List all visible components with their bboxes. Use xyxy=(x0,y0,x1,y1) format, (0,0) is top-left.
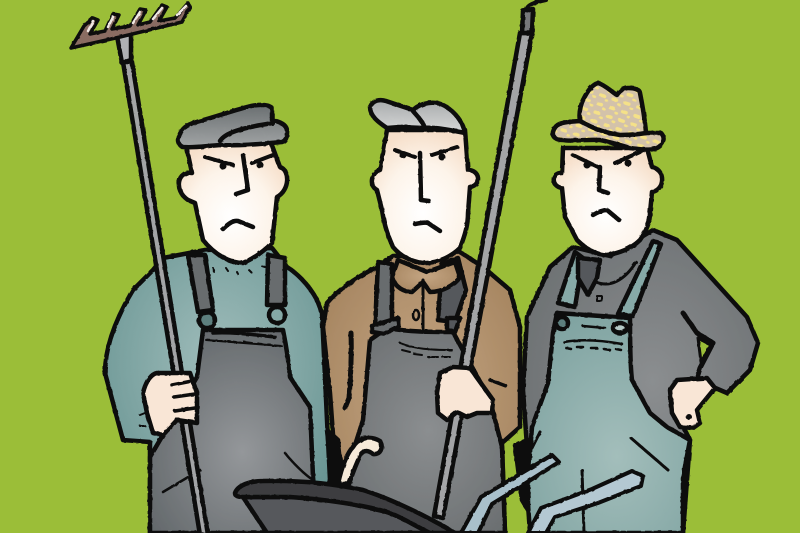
wheelbarrow xyxy=(235,438,643,533)
cap xyxy=(178,105,287,147)
left farmer xyxy=(105,105,330,533)
arm gap xyxy=(683,313,713,378)
face xyxy=(372,130,478,263)
black shadow between figures xyxy=(327,430,528,510)
face xyxy=(179,140,287,263)
straw hat xyxy=(553,83,664,150)
hands gripping tools xyxy=(143,367,506,435)
hoe xyxy=(434,0,546,518)
middle farmer xyxy=(323,100,520,533)
face xyxy=(554,148,662,255)
hand on hip xyxy=(670,378,715,428)
right farmer xyxy=(523,83,758,533)
cap xyxy=(370,100,465,133)
rake xyxy=(71,3,208,533)
